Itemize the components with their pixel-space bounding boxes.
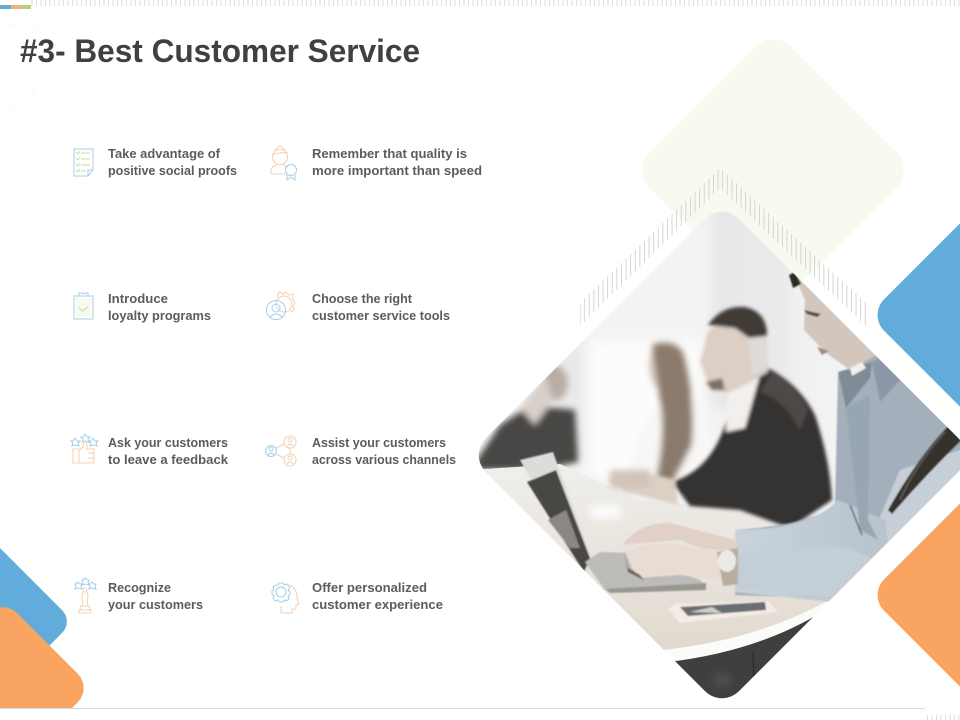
item: tools <box>266 291 450 323</box>
orange diamond right <box>878 503 960 687</box>
text: tools: customer service tools <box>312 308 450 323</box>
pale green diamond <box>632 29 914 311</box>
icon: checklist <box>74 149 93 176</box>
text: quality: more important than speed <box>312 163 482 178</box>
photo: office workers at a table, rounded diamond crop <box>460 190 960 708</box>
item: feedback <box>71 434 229 467</box>
blurred man in dark suit <box>610 307 832 528</box>
text: feedback: Ask your customers <box>108 435 228 450</box>
text: recognize: Recognize <box>108 580 171 595</box>
small items on table <box>590 470 650 519</box>
hands and watch <box>622 523 738 586</box>
text: loyalty: loyalty programs <box>108 308 211 323</box>
icon: clipboard <box>74 293 93 319</box>
photo background <box>479 232 847 516</box>
blurred woman with long hair <box>646 338 698 482</box>
text: personalized: Offer personalized <box>312 580 427 595</box>
hatched chevron behind photo <box>580 168 866 326</box>
icon: person with ribbon <box>271 146 296 180</box>
text: recognize: your customers <box>108 597 203 612</box>
text: loyalty: Introduce <box>108 291 168 306</box>
item: social proofs <box>74 146 237 178</box>
blurred woman far left <box>470 365 578 470</box>
face and hair <box>792 273 876 370</box>
text: tools <box>312 291 450 323</box>
item: quality <box>271 146 482 180</box>
faint dotted circle decoration <box>4 15 41 113</box>
text: channels <box>312 435 456 467</box>
bottom rule <box>0 708 925 709</box>
blue diamond bottom left <box>0 548 67 695</box>
text: personalized: customer experience <box>312 597 443 612</box>
item: loyalty <box>74 291 211 323</box>
table edge and underside <box>664 601 829 652</box>
text: social proofs: Take advantage of <box>108 146 221 161</box>
text: feedback: to leave a feedback <box>108 452 229 467</box>
text: personalized <box>312 580 443 612</box>
title: #3- Best Customer Service <box>20 33 420 69</box>
item: channels <box>266 435 456 467</box>
accent colour bar <box>0 5 31 9</box>
icon: trophy with stars <box>75 578 96 613</box>
woman in foreground: blouse <box>730 268 960 605</box>
text: channels: Assist your customers <box>312 435 446 450</box>
laptop <box>520 452 706 593</box>
item: personalized <box>272 580 443 613</box>
text: tools: Choose the right <box>312 291 413 306</box>
icon: head with gear <box>272 583 299 613</box>
text: channels: across various channels <box>312 452 456 467</box>
text: feedback <box>108 435 229 467</box>
text: loyalty <box>108 291 211 323</box>
orange diamond bottom left <box>0 607 84 708</box>
icon: gear and agent <box>266 292 295 320</box>
text: quality: Remember that quality is <box>312 146 467 161</box>
text: quality <box>312 146 482 178</box>
icon: connected people <box>266 436 296 466</box>
blue diamond right <box>878 223 960 407</box>
top tick strip <box>31 0 960 6</box>
bottom right ticks <box>924 715 960 720</box>
text: recognize <box>108 580 203 612</box>
text: social proofs: positive social proofs <box>108 163 237 178</box>
text: social proofs <box>108 146 237 178</box>
phone on table <box>668 601 778 623</box>
icon: thumbs up with stars <box>71 434 98 463</box>
item: recognize <box>75 578 203 613</box>
table top <box>484 464 826 650</box>
